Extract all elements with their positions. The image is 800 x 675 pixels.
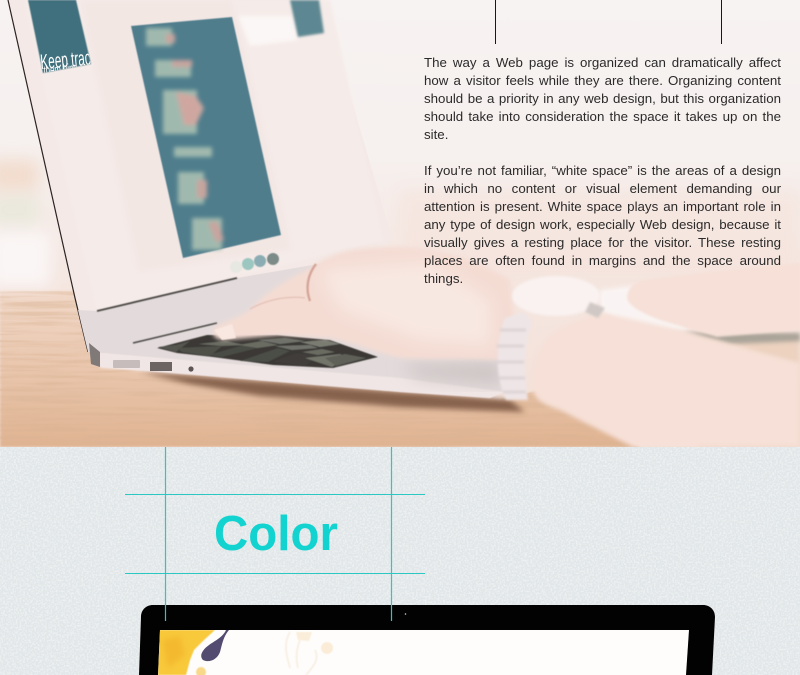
text block: white space [424, 163, 781, 286]
photo: laptop and hands on a desk [0, 0, 800, 447]
screen: dock icons [230, 253, 279, 273]
text block: white space: any type of design work, especially Web design, because it [424, 217, 781, 232]
text block: white space: places are often found in margins and the space around [424, 253, 781, 268]
black guide lines at top [496, 0, 722, 44]
base side [100, 353, 505, 398]
ring [308, 264, 316, 301]
screen label: Keep trac [39, 46, 92, 74]
guide lines around heading [125, 447, 425, 621]
hinge [89, 343, 100, 367]
far hand [627, 263, 800, 337]
screen: code panel [131, 17, 281, 258]
text block: page organization: site. [424, 127, 448, 142]
watercolor flower [286, 632, 317, 675]
screen label: them hins [43, 61, 78, 79]
text block: white space: attention is present. White space plays an important role in [424, 199, 781, 214]
monitor [139, 605, 715, 675]
screen: top right panel [290, 0, 324, 37]
text block: page organization: how a visitor feels while they are there. Organizing content [424, 73, 781, 88]
screen: dark header panel [28, 0, 92, 79]
monitor camera [405, 613, 406, 615]
heading: Color: Color [214, 507, 338, 561]
white area between watch and far hand [600, 285, 690, 330]
blurred background objects [0, 160, 800, 286]
keyboard [157, 335, 378, 368]
text block: white space: in which no content or visual element demanding our [424, 181, 781, 196]
textured section background [0, 447, 800, 675]
deck rear slot [133, 323, 217, 343]
right arm and wrist [533, 312, 800, 447]
laptop deck [78, 262, 505, 392]
text block: white space: visually gives a resting place for the visitor. These resting [424, 235, 781, 250]
lid edge [8, 0, 88, 352]
strip under far hand [683, 332, 800, 344]
text block: page organization: The way a Web page is organized can dramatically affect [424, 55, 781, 70]
laptop screen [323, 2, 342, 66]
laptop shadow [140, 372, 525, 412]
text block: page organization [424, 55, 781, 142]
text block: white space: If you’re not familiar, “white space” is the areas of a design [424, 163, 781, 178]
desk surface [0, 291, 800, 447]
text block: page organization: should take into consideration the space it takes up on the [424, 109, 781, 124]
left hand [213, 247, 515, 360]
silver palm rest shading [400, 362, 503, 385]
laptop lid [9, 0, 365, 311]
screen bottom edge [97, 278, 237, 311]
ports [113, 360, 194, 372]
watercolor splash [158, 630, 215, 675]
watch and bracelet [497, 276, 605, 400]
text block: white space: things. [424, 271, 463, 286]
ink drop [201, 630, 229, 661]
monitor screen [158, 630, 689, 675]
text block: page organization: should be a priority in any web design, but this organization [424, 91, 781, 106]
